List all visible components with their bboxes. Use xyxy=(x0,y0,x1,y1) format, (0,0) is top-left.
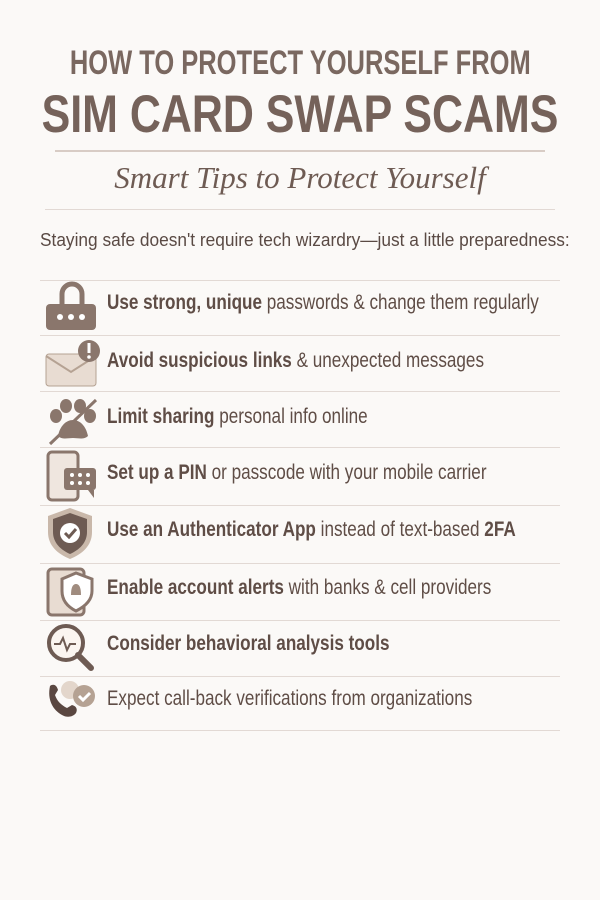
subtitle script: Smart Tips to Protect Yourself xyxy=(114,160,486,195)
tip 6: alerts xyxy=(46,568,491,616)
title line 2: SIM CARD SWAP SCAMS xyxy=(42,85,558,144)
tip 1: passwords xyxy=(46,282,539,330)
title line 1: HOW TO PROTECT YOURSELF FROM xyxy=(70,44,530,82)
tip 7: behavioral: Consider behavioral analysis tools xyxy=(107,632,389,655)
intro text: Staying safe doesn't require tech wizardry—just a little preparedness: xyxy=(40,230,570,250)
tip 5: authenticator xyxy=(48,508,516,559)
tip 3: sharing: Limit sharing personal info online xyxy=(107,405,368,428)
icon: phone with PIN bubble xyxy=(46,450,96,502)
icon: envelope alert xyxy=(46,340,100,386)
icon: padlock xyxy=(46,282,96,330)
tip 4: PIN: Set up a PIN or passcode with your mobile carrier xyxy=(107,461,487,484)
icon: paw crossed xyxy=(49,399,97,445)
tip 8: call-back xyxy=(49,681,472,717)
tip 8: call-back: Expect call-back verifications from organizations xyxy=(107,687,472,710)
tip 2: links: Avoid suspicious links & unexpected messages xyxy=(107,349,484,372)
tip 3: sharing xyxy=(49,399,368,445)
tip 7: behavioral xyxy=(47,624,389,671)
tip 5: authenticator: Use an Authenticator App instead of text-based 2FA xyxy=(107,518,516,541)
icon: shield check xyxy=(48,508,92,559)
tip 2: links xyxy=(46,340,484,386)
icon: magnifier pulse xyxy=(47,624,94,671)
icon: tablet with bell shield xyxy=(46,568,94,616)
icon: phone with check bubble xyxy=(49,681,95,717)
tip 4: PIN xyxy=(46,450,487,502)
tip 6: alerts: Enable account alerts with banks & cell providers xyxy=(107,576,491,599)
tip 1: passwords: Use strong, unique passwords & change them regularly xyxy=(107,291,539,314)
